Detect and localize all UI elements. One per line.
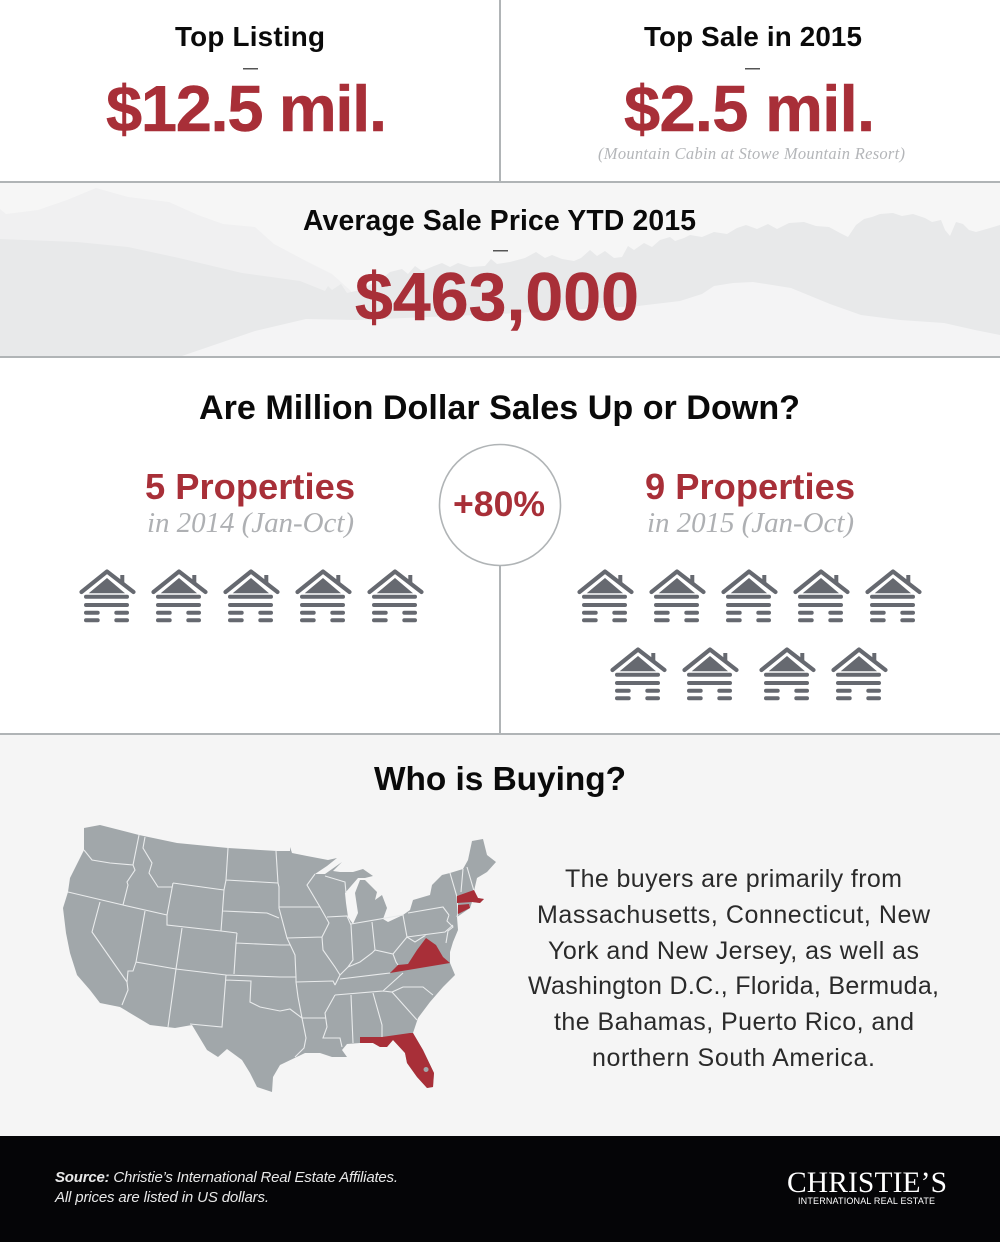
callout: +80 percent xyxy=(440,444,560,566)
logo: christie's: CHRISTIE’S xyxy=(787,1167,947,1199)
dash xyxy=(243,68,258,70)
text block: buyers description: The buyers are primarily from xyxy=(565,865,902,893)
highlighted state: massachusetts xyxy=(457,890,484,903)
text block: buyers description: York and New Jersey, as well as xyxy=(548,937,919,965)
value: 12.5 million: $12.5 mil. xyxy=(106,72,387,145)
text block: buyers description: the Bahamas, Puerto Rico, and xyxy=(554,1008,914,1036)
column: 2014 properties xyxy=(82,466,422,620)
dash xyxy=(493,250,508,252)
logo: christie's: INTERNATIONAL REAL ESTATE xyxy=(798,1196,935,1206)
mountains background xyxy=(0,188,1000,357)
value: 463000: $463,000 xyxy=(355,259,639,335)
map: united states xyxy=(63,825,496,1092)
text block: buyers description: Washington D.C., Florida, Bermuda, xyxy=(528,972,939,1000)
dash xyxy=(745,68,760,70)
source note: Source: Christie’s International Real Estate Affiliates. xyxy=(55,1169,398,1186)
value: 2.5 million: $2.5 mil. xyxy=(624,72,875,145)
heading: top listing: Top Listing xyxy=(175,21,325,52)
state borders xyxy=(68,835,474,1057)
panel: million dollar sales xyxy=(82,389,920,733)
panel: who is buying xyxy=(0,733,1000,1136)
highlighted state: connecticut xyxy=(458,904,470,914)
label: 9 properties: 9 Properties xyxy=(645,466,855,507)
heading: top sale: Top Sale in 2015 xyxy=(644,21,862,52)
heading: who is buying: Who is Buying? xyxy=(374,761,626,798)
highlighted state: florida xyxy=(360,1033,434,1088)
heading: average sale price: Average Sale Price YTD 2015 xyxy=(303,204,696,236)
label: 5 properties: 5 Properties xyxy=(145,466,355,507)
source note: All prices are listed in US dollars. xyxy=(54,1189,269,1206)
callout: +80 percent: +80% xyxy=(453,484,545,524)
label: in 2014: in 2014 (Jan-Oct) xyxy=(147,507,354,539)
column: 2015 properties xyxy=(580,466,920,698)
text block: buyers description xyxy=(528,865,939,1072)
footer xyxy=(0,1136,1000,1242)
note: property name: (Mountain Cabin at Stowe Mountain Resort) xyxy=(598,144,905,163)
heading: up or down: Are Million Dollar Sales Up or Down? xyxy=(199,389,800,427)
panel: average sale price xyxy=(0,181,1000,358)
text block: buyers description: Massachusetts, Connecticut, New xyxy=(537,901,931,929)
label: in 2015: in 2015 (Jan-Oct) xyxy=(647,507,854,539)
source note xyxy=(54,1169,398,1206)
text block: buyers description: northern South America. xyxy=(592,1044,875,1072)
icons: 5 houses xyxy=(82,572,422,620)
panel: top sale xyxy=(598,21,905,163)
icons: 9 houses xyxy=(580,572,920,698)
highlighted state: virginia xyxy=(390,938,450,973)
panel: top listing xyxy=(106,21,387,145)
